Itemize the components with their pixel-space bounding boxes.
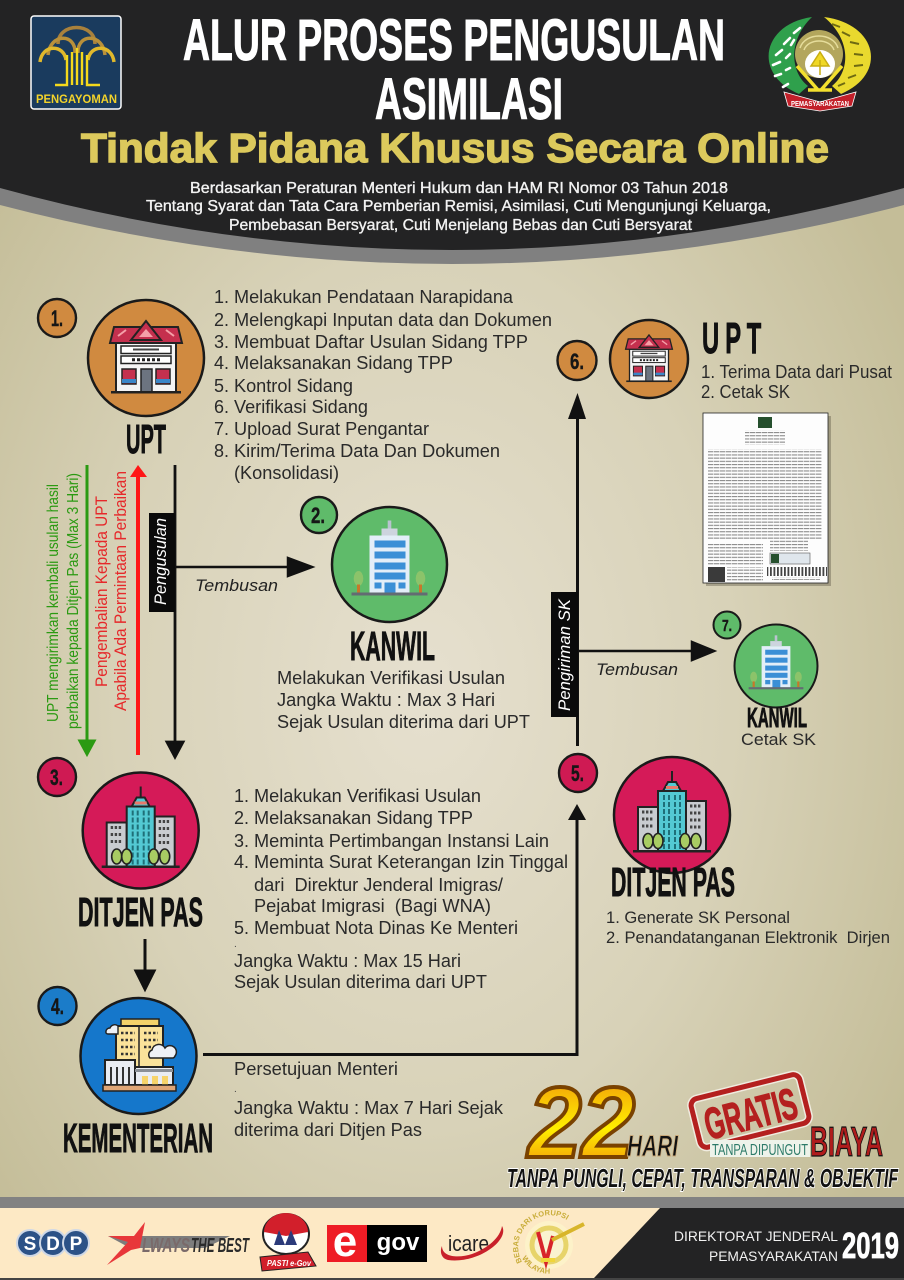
subtitle: Tindak Pidana Khusus Secara Online [81,125,829,171]
step 1: task list: Verifikasi Sidang [234,397,368,417]
step 1: UPT icon [88,300,204,416]
stamp: gratis tanpa dipungut biaya [690,1073,883,1165]
step 1: task list: Melengkapi Inputan data dan Dokumen [234,310,552,330]
green arrow text: UPT mengirimkan kembali usulan hasil [45,484,62,722]
arrow: red return [136,472,140,755]
step 3: task list: Pejabat Imigrasi (Bagi WNA) [254,896,491,916]
step 2: description [277,668,530,732]
step 5: Ditjen Pas icon [614,757,730,873]
step 4: description [234,1059,504,1140]
step 7: badge [714,612,740,638]
step 3: task list: 4. [234,852,249,872]
Pengiriman SK label: Pengiriman SK [555,598,574,711]
step 3: task list: 5. [234,918,249,938]
text: KEMENTERIAN [63,1115,213,1161]
step 1: task list: 7. [214,419,229,439]
step 3: task list [234,786,568,992]
step 1: task list: Upload Surat Pengantar [234,419,429,439]
badge: 22 hari: HARI [627,1130,678,1163]
step 7: Kanwil label: KANWIL [747,702,807,733]
step 5: task list: 1. Generate SK Personal [606,908,790,927]
step 2: Kanwil icon [332,507,447,622]
step 2: description: Sejak Usulan diterima dari UPT [277,712,530,732]
step 1: task list [214,287,552,483]
footer: directorate text [674,1228,838,1264]
arrow: UPT to Ditjen Pas [167,465,183,757]
arrow: Kementerian to Ditjen Pas [203,818,577,1054]
green arrow text: perbaikan kepada Ditjen Pas (Max 3 Hari) [65,473,82,729]
title: ASIMILASI [375,67,563,132]
step 1: task list: 5. [214,376,229,396]
step 1: task list: 4. [214,353,229,373]
logo: PASTI [260,1213,316,1271]
footer band [0,1197,904,1280]
step 6: badge [558,341,596,380]
arrow: Ditjen Pas to UPT [576,412,579,746]
step 5: Ditjen Pas label: DITJEN PAS [611,859,735,905]
step 3: task list: Melaksanakan Sidang TPP [254,808,473,828]
step 3: task list: Melakukan Verifikasi Usulan [254,786,481,806]
step 6: task list: 2. Cetak SK [701,382,790,402]
step 3: task list: Membuat Nota Dinas Ke Menteri [254,918,518,938]
Pengusulan label: Pengusulan [151,518,170,605]
logo: Always the best: THE BEST [191,1235,250,1257]
Tembusan label: Tembusan [195,576,278,595]
step 6: UPT icon [610,320,688,398]
step 6: task list: 1. Terima Data dari Pusat [701,362,892,382]
step 1: badge: 1. [51,306,63,331]
step 3: Ditjen Pas label: DITJEN PAS [78,889,203,935]
logo: Pemasyarakatan emblem [769,17,871,111]
step 6: badge: 6. [570,349,584,374]
step 1: task list: 2. [214,310,229,330]
footer: directorate text: PEMASYARAKATAN [709,1248,838,1264]
red arrow text: Pengembalian Kepada UPT [93,496,111,687]
step 5: task list: 2. Penandatanganan Elektronik Dirjen [606,928,890,947]
step 1: task list: Kontrol Sidang [234,376,353,396]
logo: icare: icare [448,1231,489,1256]
step 5: badge: 5. [571,761,584,786]
legal basis text: Pembebasan Bersyarat, Cuti Menjelang Bebas dan Cuti Bersyarat [229,217,693,234]
legal basis text: Berdasarkan Peraturan Menteri Hukum dan HAM RI Nomor 03 Tahun 2018 [190,180,728,197]
step 7: Kanwil icon [734,624,818,708]
step 1: task list: 6. [214,397,229,417]
step 3: badge [38,758,76,796]
footer: directorate text: DIREKTORAT JENDERAL [674,1228,838,1244]
arrow head: Kementerian to Ditjen Pas [568,804,586,820]
step 3: task list: Sejak Usulan diterima dari UPT [234,972,487,992]
logo: wilayah bebas korupsi: WILAYAH [522,1255,550,1274]
badge: 22 hari: 22 [526,1067,635,1179]
step 3: task list: Meminta Surat Keterangan Izin Tinggal [254,852,568,872]
step 1: task list: Melaksanakan Sidang TPP [234,353,453,373]
step 6: task list [701,362,892,402]
arrow head: to UPT [568,393,586,419]
step 2: description: Jangka Waktu : Max 3 Hari [277,690,495,710]
logo: e-gov: gov [377,1229,420,1256]
step 3: task list: dari Direktur Jenderal Imigras/ [254,875,503,895]
red arrow text: Apabila Ada Permintaan Perbaikan [112,471,130,711]
logo: Pengayoman [31,16,121,109]
step 3: Ditjen Pas icon [83,772,199,888]
SK document [703,413,831,586]
step 3: task list: 2. [234,808,249,828]
step 2: badge [301,497,337,533]
logo: Pengayoman: PENGAYOMAN [36,94,117,106]
arrow: tembusan to Kanwil 7 [578,642,714,660]
title [183,8,725,132]
stamp: gratis tanpa dipungut biaya: TANPA DIPUNGUT [712,1142,808,1159]
step 1: badge [38,299,76,337]
step 5: task list [606,908,890,947]
step 7: description: Cetak SK [741,730,817,749]
logo: SDP: D [46,1234,60,1255]
step 2: badge: 2. [311,503,325,528]
step 4: description: diterima dari Ditjen Pas [234,1120,422,1140]
stamp: gratis tanpa dipungut biaya: GRATIS [699,1079,802,1150]
logo: SDP [17,1230,89,1256]
logo: e-gov [327,1217,427,1266]
logo: wilayah bebas korupsi: BEBAS DARI KORUPSI [513,1210,569,1264]
red arrow text [93,471,130,711]
step 1: task list: Kirim/Terima Data Dan Dokumen [234,441,500,461]
arrow: Ditjen Pas to Kementerian [136,939,154,989]
red arrow head [130,465,147,477]
Pengiriman SK label [551,592,578,717]
step 6: UPT label: UPT [702,314,762,363]
logo: Always the best: LWAYS [142,1235,190,1257]
step 4: Kementerian icon [80,998,196,1114]
step 1: task list: (Konsolidasi) [234,463,339,483]
step 3: task list: 1. [234,786,249,806]
step 2: description: Melakukan Verifikasi Usulan [277,668,505,688]
Tembusan label: Tembusan [596,660,678,679]
legal basis text [146,180,771,234]
step 3: badge: 3. [50,765,63,790]
step 4: description: . [234,1084,237,1095]
step 4: description: Jangka Waktu : Max 7 Hari Sejak [234,1098,504,1118]
Pengusulan label [149,513,175,612]
arrow: tembusan to Kanwil [175,558,312,576]
step 1: task list: 8. [214,441,229,461]
step 4: badge [38,987,76,1025]
step 1: task list: 3. [214,332,229,352]
arrow: green return [80,465,94,754]
step 3: task list: . [234,939,237,950]
logo: Always the best [107,1222,250,1265]
step 3: task list: 3. [234,831,249,851]
legal basis text: Tentang Syarat dan Tata Cara Pemberian Remisi, Asimilasi, Cuti Mengunjungi Keluarga, [146,198,771,215]
logo: Pemasyarakatan emblem: PEMASYARAKATAN [791,99,849,108]
logo: SDP: P [70,1234,83,1255]
step 2: Kanwil label: KANWIL [350,623,435,669]
step 5: badge [559,754,597,792]
step 4: badge: 4. [51,994,64,1019]
green arrow text [45,473,82,729]
text: UPT [126,416,166,462]
header band [0,0,904,264]
logo: SDP: S [24,1234,36,1255]
step 3: task list: Meminta Pertimbangan Instansi Lain [254,831,549,851]
step 7: badge: 7. [722,618,732,635]
step 1: task list: Melakukan Pendataan Narapidana [234,287,514,307]
logo: e-gov: e [333,1217,357,1266]
step 1: task list: 1. [214,287,229,307]
step 4: description: Persetujuan Menteri [234,1059,398,1079]
logo: icare [441,1226,503,1260]
logo: PASTI: PASTI e-Gov [267,1259,312,1268]
logo: wilayah bebas korupsi [513,1210,585,1274]
step 3: task list: Jangka Waktu : Max 15 Hari [234,951,461,971]
step 1: task list: Membuat Daftar Usulan Sidang TPP [234,332,528,352]
